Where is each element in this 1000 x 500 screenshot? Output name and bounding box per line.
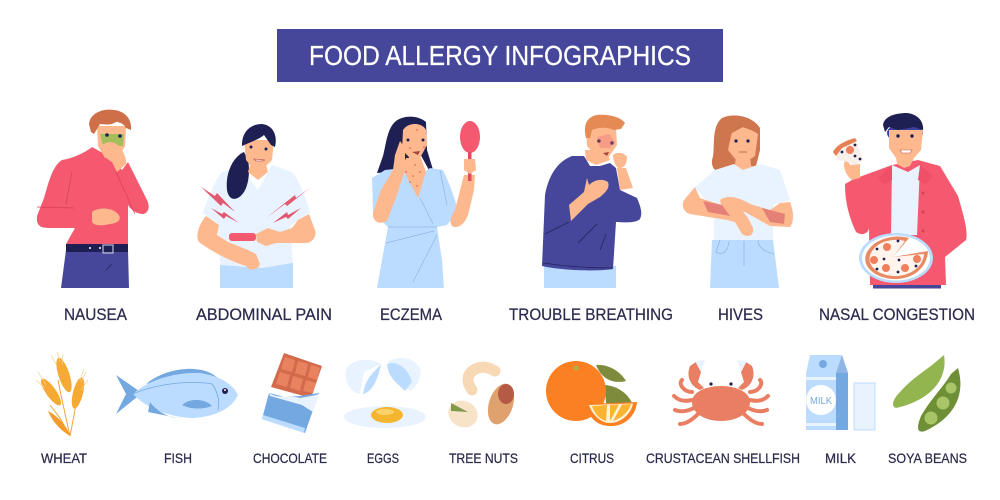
icon: fish [116,369,238,418]
food labels: CHOCOLATE [253,450,327,466]
figure: abdominal pain woman [197,124,316,288]
figure: nausea man [37,110,149,288]
figure: nasal congestion man [833,113,967,288]
symptom labels: ECZEMA [380,305,443,324]
food labels: MILK [825,450,857,466]
food labels: CITRUS [570,450,614,466]
symptom labels: ABDOMINAL PAIN [196,305,332,324]
food labels: FISH [164,450,192,466]
symptom labels [64,305,975,324]
title banner: FOOD ALLERGY INFOGRAPHICS [309,40,691,71]
icon: crab [674,360,768,424]
food labels: WHEAT [41,450,87,466]
food labels: EGGS [367,450,399,466]
figure: hives woman [683,115,793,288]
icon: soya beans [893,355,960,432]
food labels: SOYA BEANS [888,450,967,466]
title banner [277,29,723,82]
icon: milk: MILK [810,396,832,407]
figure: trouble breathing man [542,115,641,288]
symptom labels: NAUSEA [64,305,128,324]
food labels: CRUSTACEAN SHELLFISH [646,450,800,466]
symptom labels: NASAL CONGESTION [819,305,975,324]
symptom labels: TROUBLE BREATHING [509,305,673,324]
icon: citrus [546,361,637,426]
figure: eczema woman [372,117,480,288]
icon: chocolate [262,353,322,433]
icon: wheat [36,352,88,436]
icon: eggs [344,358,426,428]
food labels: TREE NUTS [449,450,518,466]
icon: milk [806,355,875,430]
food labels [41,450,967,466]
symptom labels: HIVES [718,305,763,324]
icon: tree nuts [444,367,519,432]
